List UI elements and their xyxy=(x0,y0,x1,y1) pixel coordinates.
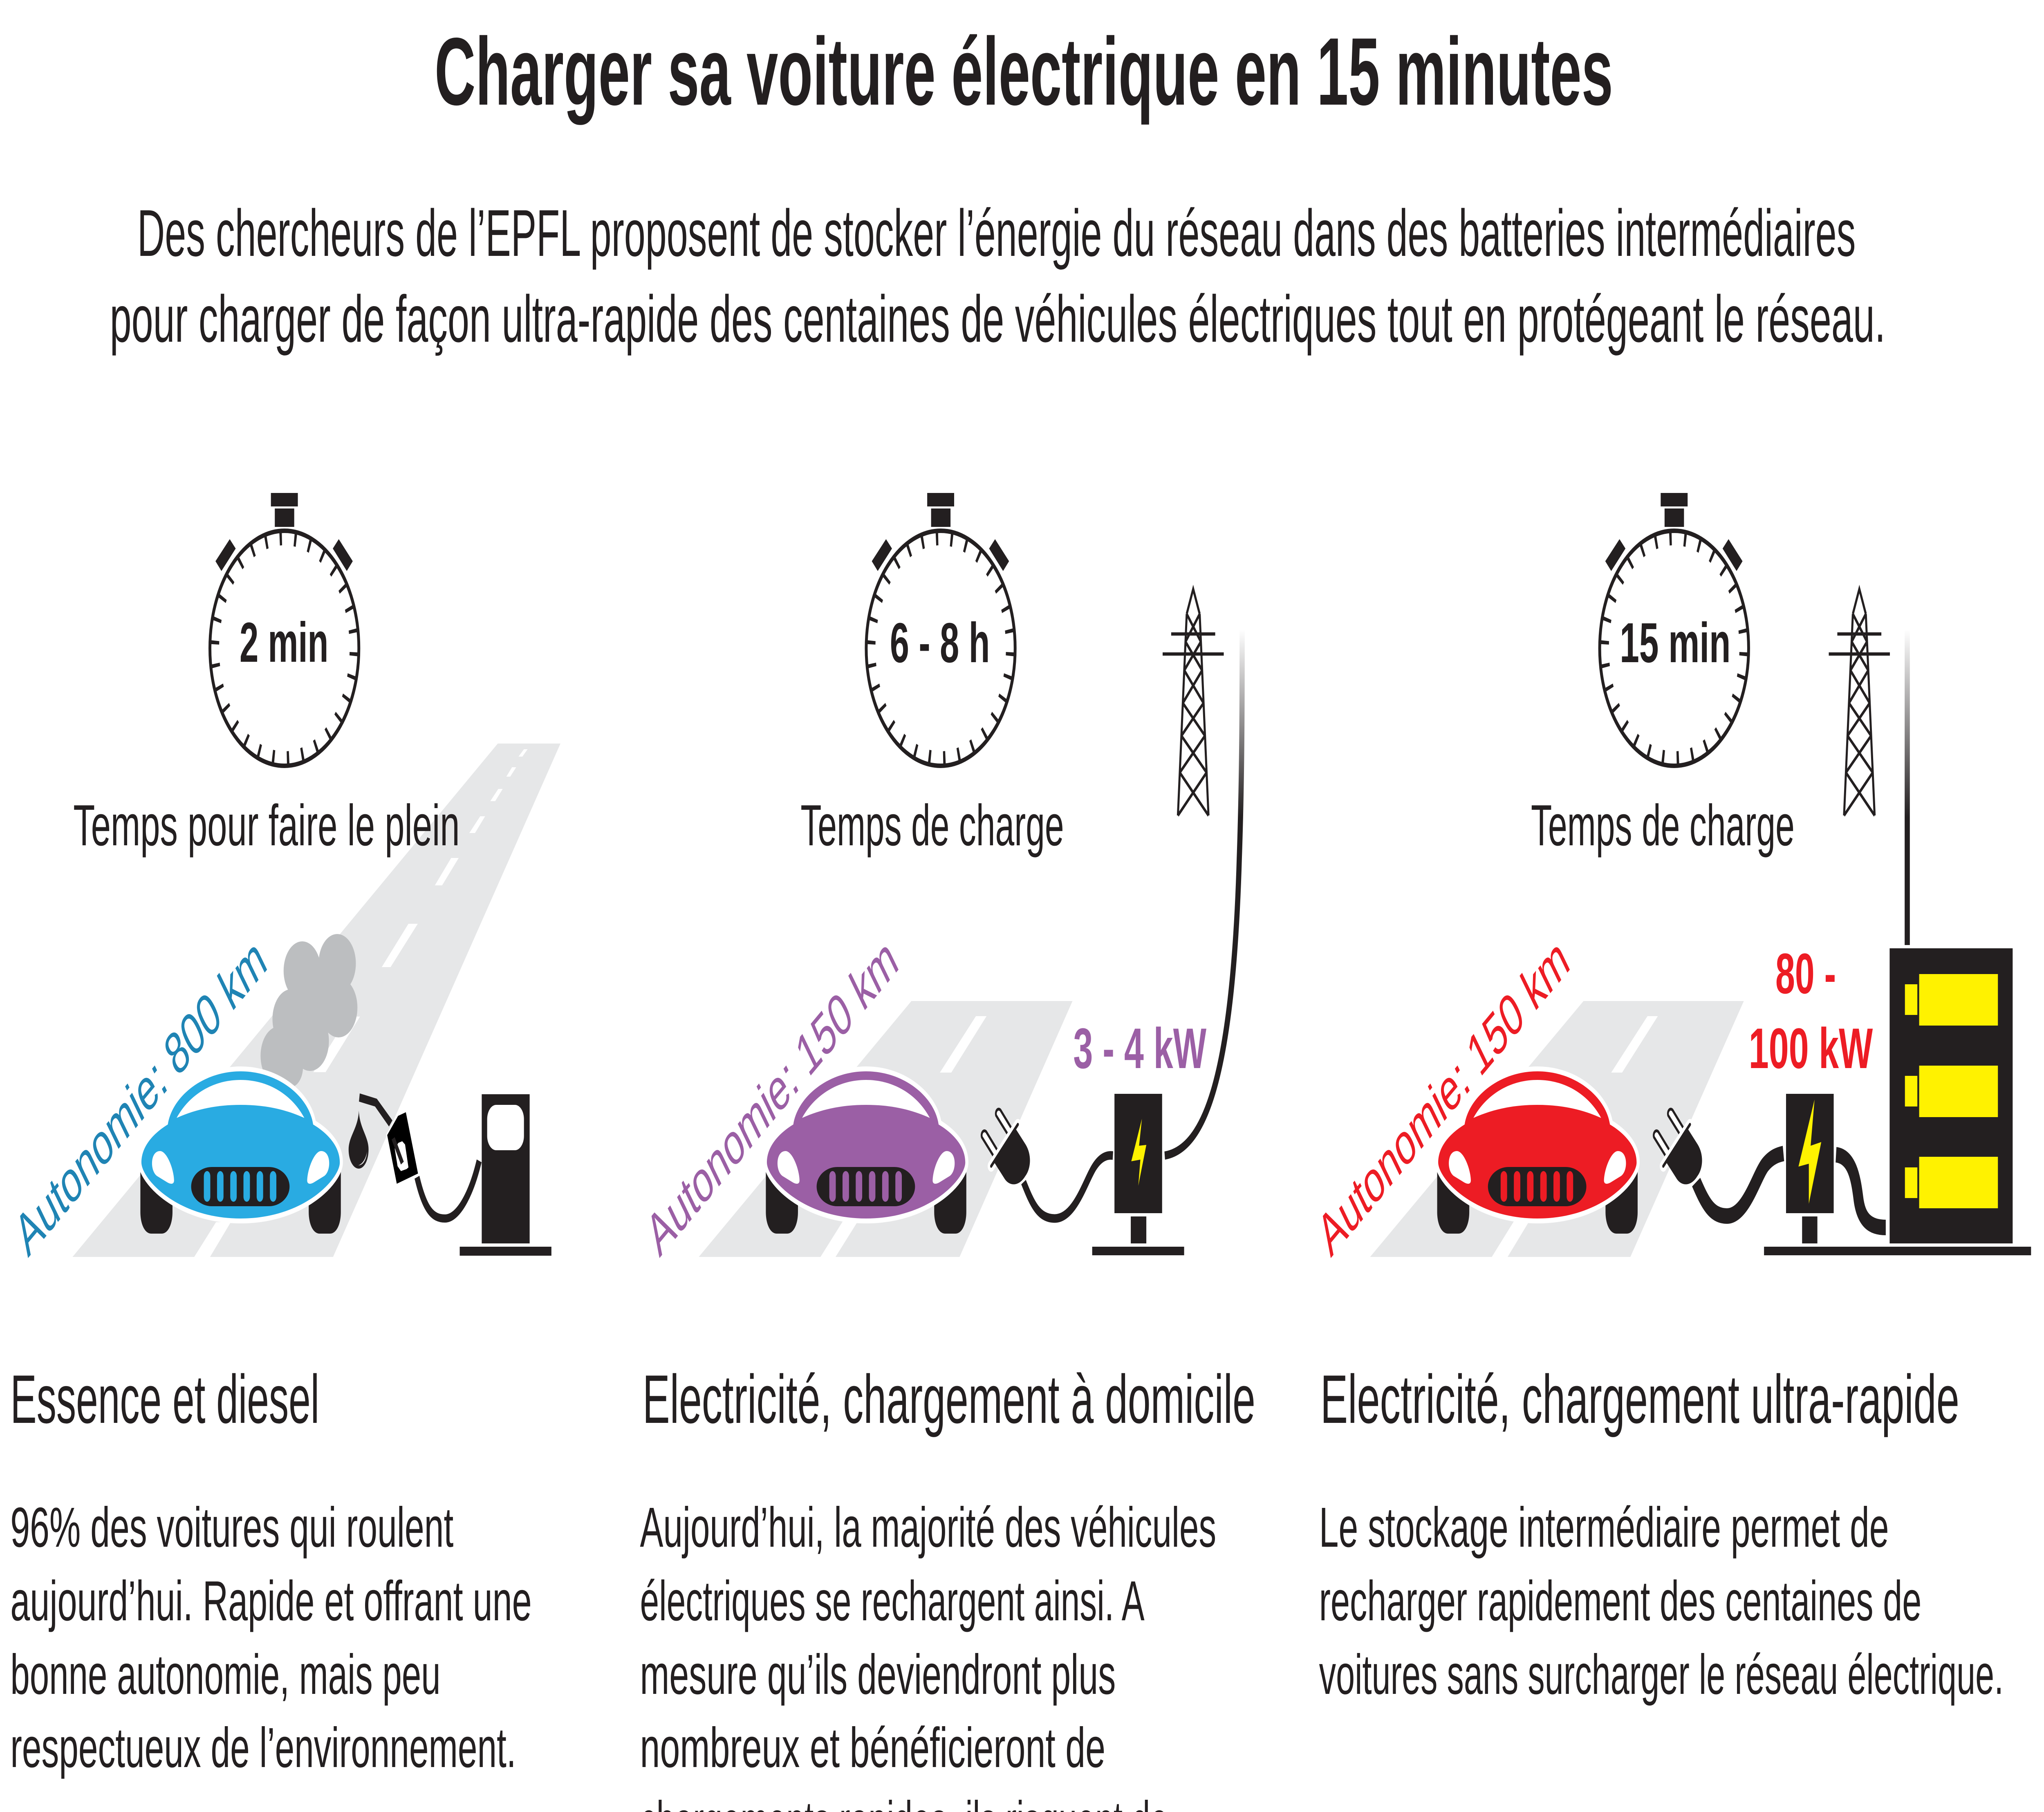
label: 80-100 kW xyxy=(1749,941,1873,1080)
icon: fuel pump xyxy=(460,1094,551,1256)
icon: pylon xyxy=(1829,589,1890,815)
label: 80-100 kW: 80 - xyxy=(1775,941,1836,1006)
power line to charger xyxy=(1165,629,1242,1156)
label: temps de charge: Temps de charge xyxy=(800,793,1064,858)
text block: chargement ultra-rapide: recharger rapidement des centaines de xyxy=(1319,1570,1921,1633)
label: autonomie 150 km: Autonomie: 150 km xyxy=(1310,924,1577,1268)
text block: chargement ultra-rapide xyxy=(1319,1496,2004,1706)
icon: pylon xyxy=(1163,589,1224,815)
label: temps pour faire le plein: Temps pour faire le plein xyxy=(73,793,460,858)
panel: chargement à domicile xyxy=(639,493,1242,1268)
label: temps de charge: Temps de charge xyxy=(1531,793,1795,858)
subtitle: Des chercheurs de l’EPFL proposent de stocker l’énergie du réseau dans des batteries intermédiaires xyxy=(137,196,1856,270)
icon: fuel nozzle and hose xyxy=(359,1093,479,1218)
subtitle xyxy=(110,196,1885,356)
text block: essence et diesel: bonne autonomie, mais peu xyxy=(10,1643,441,1706)
panel: essence et diesel xyxy=(7,493,560,1268)
icon: stopwatch 2 min: 2 min xyxy=(240,611,328,674)
thick cables xyxy=(1696,1153,1886,1227)
icon: stopwatch 15 min: 15 min xyxy=(1620,611,1730,674)
text block: chargement à domicile xyxy=(640,1496,1216,1812)
road: ultra-fast charging xyxy=(1370,1001,1744,1257)
icon: blue car xyxy=(140,1071,341,1234)
text block: essence et diesel: 96% des voitures qui roulent xyxy=(10,1496,453,1559)
text block: chargement à domicile: Aujourd’hui, la majorité des véhicules xyxy=(640,1496,1216,1559)
text block: chargement à domicile: nombreux et bénéficieront de xyxy=(640,1716,1105,1779)
heading: chargement à domicile: Electricité, chargement à domicile xyxy=(643,1361,1255,1438)
icon: red car xyxy=(1437,1071,1638,1234)
icon: plug xyxy=(982,1109,1030,1184)
icon: stopwatch 15 min xyxy=(1600,493,1748,766)
panel: chargement ultra-rapide xyxy=(1310,493,2031,1268)
road: highway xyxy=(72,744,560,1257)
icon: fast charger xyxy=(1764,1094,2031,1255)
road: home charging xyxy=(699,1001,1073,1257)
power line to storage xyxy=(1905,630,1910,945)
label: autonomie 800 km: Autonomie: 800 km xyxy=(7,924,274,1268)
icon: plug xyxy=(1654,1109,1702,1184)
icon: battery storage xyxy=(1889,948,2013,1243)
subtitle: pour charger de façon ultra-rapide des centaines de véhicules électriques tout en protégeant le réseau. xyxy=(110,282,1885,356)
text block: chargement ultra-rapide: Le stockage intermédiaire permet de xyxy=(1319,1496,1889,1559)
title: Charger sa voiture électrique en 15 minutes xyxy=(435,18,1613,125)
heading: chargement ultra-rapide: Electricité, chargement ultra-rapide xyxy=(1320,1361,1959,1438)
label: 3-4 kW: 3 - 4 kW xyxy=(1073,1016,1206,1080)
icon: smoke xyxy=(260,934,357,1087)
plug cable xyxy=(1024,1156,1113,1218)
icon: stopwatch 6-8 h xyxy=(866,493,1015,766)
text block: essence et diesel: respectueux de l’environnement. xyxy=(10,1716,516,1779)
icon: purple car xyxy=(766,1071,966,1234)
label: 80-100 kW: 100 kW xyxy=(1749,1016,1873,1080)
text block: chargement ultra-rapide: voitures sans surcharger le réseau électrique. xyxy=(1319,1643,2004,1706)
text block: chargement à domicile: électriques se rechargent ainsi. A xyxy=(640,1570,1145,1633)
icon: home charger xyxy=(1092,1094,1184,1255)
text block: essence et diesel xyxy=(10,1496,532,1779)
heading: essence et diesel: Essence et diesel xyxy=(10,1361,319,1438)
text block: chargement à domicile: mesure qu’ils deviendront plus xyxy=(640,1643,1116,1706)
icon: fuel drop xyxy=(349,1111,369,1169)
label: autonomie 150 km: Autonomie: 150 km xyxy=(639,924,905,1268)
text block: essence et diesel: aujourd’hui. Rapide et offrant une xyxy=(10,1570,532,1633)
icon: stopwatch 6-8 h: 6 - 8 h xyxy=(890,611,990,674)
icon: stopwatch 2 min xyxy=(210,493,359,766)
